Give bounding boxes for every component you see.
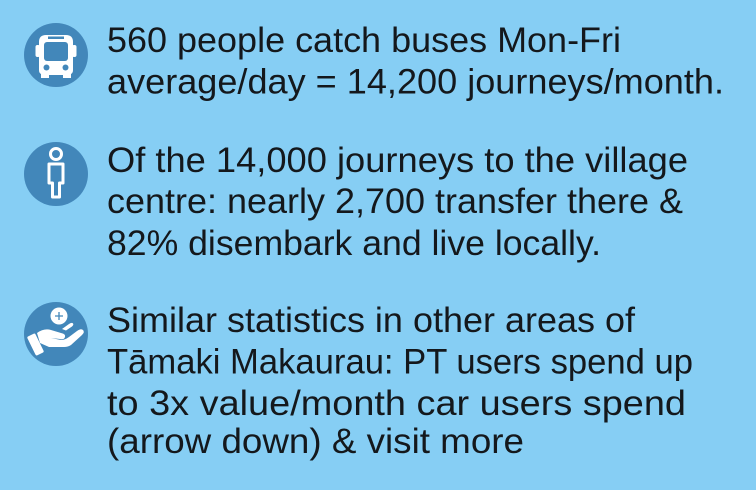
- text: other areas statistics: Tāmaki Makaurau: PT users spend up: [107, 342, 693, 382]
- text: other areas statistics: Similar statistics in other areas of: [107, 301, 635, 340]
- icon: person: [24, 142, 88, 206]
- text: village centre journeys: 82% disembark and live locally.: [107, 224, 601, 263]
- text: bus journeys: average/day = 14,200 journeys/month.: [107, 62, 724, 102]
- text: other areas statistics: to 3x value/month car users spend: [107, 384, 686, 423]
- text: other areas statistics: (arrow down) & visit more: [107, 422, 524, 461]
- text: village centre journeys: Of the 14,000 journeys to the village: [107, 141, 688, 180]
- icon: bus: [24, 23, 88, 87]
- text: bus journeys: 560 people catch buses Mon-Fri: [107, 21, 621, 60]
- text: village centre journeys: [107, 141, 688, 263]
- text: village centre journeys: centre: nearly 2,700 transfer there &: [107, 182, 683, 221]
- icon: hand with plus: [24, 302, 88, 366]
- text: other areas statistics: [107, 301, 693, 461]
- text: bus journeys: [107, 21, 724, 102]
